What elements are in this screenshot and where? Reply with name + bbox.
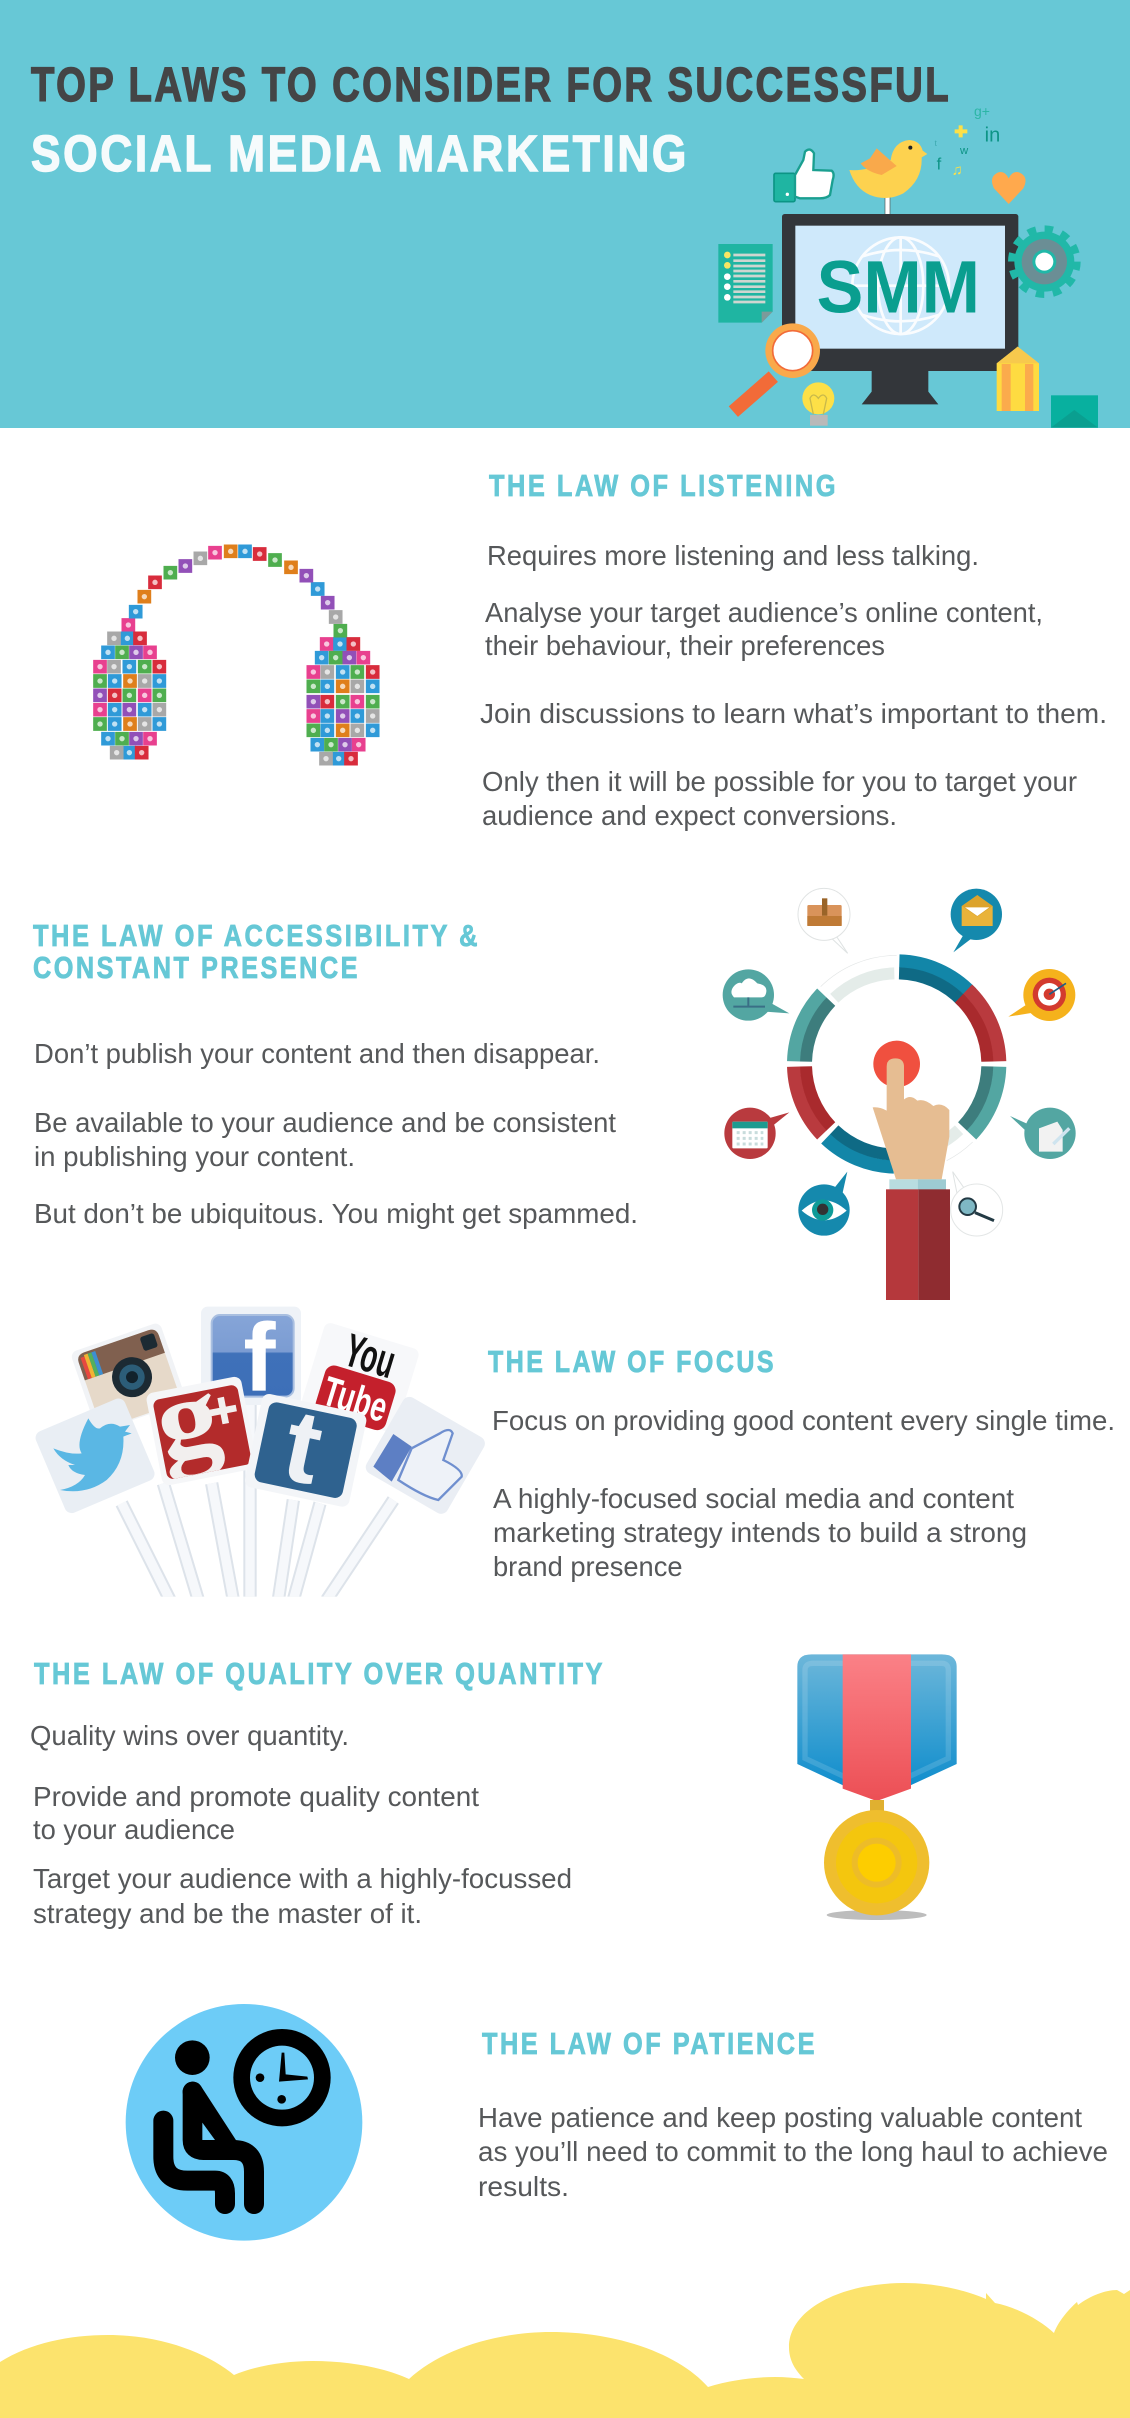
floating social labels: w (959, 145, 969, 157)
icon: shirt cuff (889, 1179, 946, 1190)
icon: heart (992, 172, 1026, 204)
bubble: envelope (951, 889, 1002, 952)
illustration: hand pressing button in ring (723, 888, 1076, 1300)
text block: listening: Requires more listening and less talking. (487, 540, 979, 571)
floating social labels: g+ (974, 103, 990, 119)
title: SOCIAL MEDIA MARKETING (31, 125, 689, 182)
icon: hand (873, 1058, 949, 1179)
text block: quality: strategy and be the master of it. (33, 1898, 422, 1929)
heading: law of listening: THE LAW OF LISTENING (489, 469, 838, 503)
icon: magnifying glass (733, 323, 820, 412)
text block: listening: audience and expect conversions. (482, 800, 897, 831)
heading: law of quality: THE LAW OF QUALITY OVER QUANTITY (34, 1657, 605, 1691)
icon: gear (1012, 229, 1077, 294)
heading: law of accessibility: THE LAW OF ACCESSIBILITY & (33, 919, 480, 953)
icon: yellow bird (849, 140, 927, 198)
icon: envelope (1051, 395, 1098, 428)
icon: pencil house (997, 347, 1039, 411)
sign: instagram (70, 1322, 187, 1432)
white segment outline (821, 955, 973, 1161)
text block: listening: Only then it will be possible for you to target your (482, 766, 1077, 797)
red button (873, 1041, 920, 1087)
sign sticks (122, 1403, 393, 1600)
clock (233, 2029, 331, 2126)
icon: sleeve (886, 1189, 950, 1300)
text block: quality: Target your audience with a highly-focussed (33, 1863, 572, 1894)
icon: monitor (782, 214, 1018, 404)
text block: accessibility: Be available to your audience and be consistent (34, 1107, 616, 1138)
bubble: calendar (724, 1108, 789, 1159)
floating social labels: f (937, 154, 942, 173)
text block: patience: Have patience and keep posting valuable content (478, 2102, 1082, 2133)
icon: bird pole (885, 197, 890, 215)
text block: patience: as you’ll need to commit to the long haul to achieve (478, 2136, 1108, 2167)
text block: listening: Analyse your target audience’s online content, (485, 597, 1043, 628)
sign: tumblr: t (274, 1386, 332, 1506)
sign: youtube (300, 1316, 422, 1436)
tiles: red (115, 554, 373, 759)
text block: listening: their behaviour, their preferences (485, 630, 885, 661)
text block: quality (30, 1720, 572, 1929)
floating social labels: in (985, 125, 1000, 147)
icon: checklist document (718, 244, 773, 323)
text block: focus: A highly-focused social media and content (493, 1483, 1014, 1514)
icon: globe (852, 237, 949, 334)
text block: focus: marketing strategy intends to build a strong (493, 1517, 1027, 1548)
tiles: blue (108, 551, 373, 759)
sign: facebook (201, 1304, 301, 1412)
sign: youtube: You (339, 1324, 402, 1388)
icon: light bulb (802, 382, 834, 426)
text block: listening: Join discussions to learn what’s important to them. (480, 698, 1107, 729)
icon: thumbs up (774, 150, 834, 202)
ring segments: inner band (806, 973, 987, 1155)
floating social labels: t (935, 139, 938, 148)
heading: law of patience: THE LAW OF PATIENCE (482, 2027, 817, 2061)
text block: accessibility: Don’t publish your content and then disappear. (34, 1038, 600, 1069)
icon: medal (797, 1654, 957, 1920)
text block: quality: to your audience (33, 1814, 235, 1845)
icon: person waiting with clock (126, 2004, 362, 2241)
text block: patience (478, 2102, 1108, 2202)
SMM label: SMM (817, 246, 980, 329)
tiles: orange (130, 551, 343, 730)
sign: google plus: g (145, 1350, 229, 1486)
seated figure (163, 2092, 254, 2204)
sign: tumblr (242, 1379, 371, 1515)
footer clouds (0, 2283, 1130, 2418)
ring segments: outer band (794, 961, 1000, 1167)
header band (0, 0, 1130, 428)
bubble: briefcase (798, 888, 850, 953)
tiles: green (100, 560, 373, 745)
heading: law of focus: THE LAW OF FOCUS (488, 1345, 776, 1379)
bubble: eye (798, 1172, 850, 1236)
tiles: pink (100, 553, 363, 745)
illustration: SMM monitor and social icons (718, 103, 1098, 428)
illustration: social media signs (33, 1304, 488, 1600)
text block: focus (492, 1405, 1115, 1582)
sign: twitter (33, 1396, 157, 1515)
text block: focus: brand presence (493, 1551, 682, 1582)
text block: quality: Provide and promote quality content (33, 1781, 479, 1812)
text block: patience: results. (478, 2171, 569, 2202)
floating social labels: ♫ (952, 163, 963, 179)
tiles: gray (114, 558, 373, 759)
sign: youtube: Tube (317, 1367, 393, 1431)
text block: focus: Focus on providing good content every single time. (492, 1405, 1115, 1436)
bubble: document and pen (1010, 1108, 1076, 1159)
sign: facebook like (363, 1394, 488, 1516)
tiles: purple (100, 566, 349, 745)
text block: accessibility: in publishing your content. (34, 1141, 355, 1172)
heading: law of accessibility (33, 919, 480, 985)
bubble: cloud (723, 969, 789, 1021)
icon: plus (955, 125, 967, 137)
sign: facebook: f (243, 1304, 276, 1412)
bubble: target (1008, 969, 1075, 1021)
sign: google plus (146, 1376, 250, 1485)
tile glyphs (100, 551, 373, 759)
floating social labels (935, 103, 1000, 179)
illustration: headphones of app icons (100, 551, 373, 759)
text block: quality: Quality wins over quantity. (30, 1720, 349, 1751)
bubble: magnifier (951, 1172, 1003, 1236)
heading: law of accessibility: CONSTANT PRESENCE (33, 951, 360, 985)
text block: listening (480, 540, 1107, 831)
title (31, 59, 951, 182)
text block: accessibility: But don’t be ubiquitous. You might get spammed. (34, 1198, 638, 1229)
text block: accessibility (34, 1038, 638, 1229)
